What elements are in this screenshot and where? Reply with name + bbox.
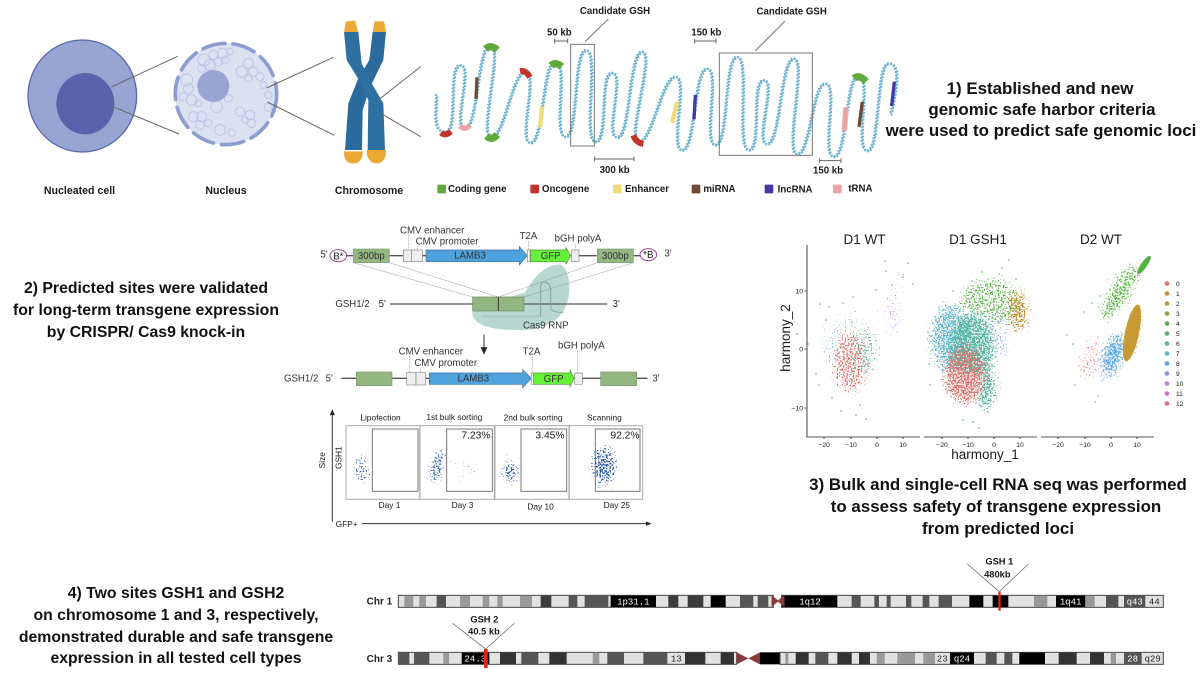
flow labels: Day 10 — [527, 502, 554, 512]
miRNA marks — [476, 77, 862, 127]
legend: Oncogene — [542, 184, 590, 195]
enhancer marks — [540, 102, 677, 127]
legend: miRNA — [703, 184, 736, 195]
icon: chromosome — [344, 21, 386, 163]
flow labels: Lipofection — [360, 413, 401, 423]
legend — [437, 184, 872, 195]
donor construct: *B — [643, 250, 653, 261]
plot titles — [844, 232, 1122, 247]
edited locus: 3' — [652, 373, 660, 384]
GSH target locus: 5' — [379, 299, 386, 310]
panel: chromatin strand with annotated elements — [435, 6, 897, 195]
axis tick labels: 0 — [799, 346, 803, 354]
flow axis arrows — [330, 410, 651, 526]
plot titles: D1 GSH1 — [949, 232, 1007, 247]
ideogram: chromosome 1: 1q41 — [1060, 597, 1081, 607]
candidate GSH labels: Candidate GSH — [757, 6, 827, 17]
Cas9 RNP blob — [472, 264, 569, 330]
axis tick labels: 10 — [1016, 442, 1024, 449]
ideogram: chromosome 1: 1q12 — [799, 597, 821, 607]
cluster legend: 6 — [1176, 341, 1180, 348]
ideogram: chromosome 1: 44 — [1149, 597, 1160, 607]
scatter D1 GSH1 — [928, 260, 1030, 428]
scatter D1 WT — [797, 261, 913, 419]
legend: Enhancer — [625, 184, 669, 195]
axis tick labels: −20 — [1052, 442, 1064, 449]
cluster legend: 7 — [1176, 351, 1180, 358]
GSH target locus: GSH1/2 — [335, 299, 370, 310]
donor construct: 300bp — [602, 251, 629, 262]
edited locus: GSH1/2 — [284, 373, 318, 384]
ideogram: chromosome 3: q24 — [954, 654, 970, 664]
donor construct: 3' — [664, 248, 672, 259]
plot titles: D2 WT — [1080, 232, 1122, 247]
marker: GSH 1: GSH 1 — [985, 557, 1013, 567]
cluster legend: 5 — [1176, 331, 1180, 338]
panel: cell to chromatin overview — [28, 21, 421, 197]
scale bars — [547, 28, 843, 176]
axis titles — [778, 304, 1019, 462]
flow labels: Day 1 — [379, 500, 401, 510]
flow labels: Scanning — [587, 413, 622, 423]
ideogram: chromosome 3: 28 — [1127, 654, 1138, 664]
cluster legend: 9 — [1176, 371, 1180, 378]
scale bars: 300 kb — [600, 165, 630, 176]
heading 4: on chromosome 1 and 3, respectively, — [33, 607, 319, 624]
legend: tRNA — [848, 184, 872, 195]
axis tick labels: −10 — [1079, 442, 1091, 449]
tRNA marks — [460, 107, 846, 131]
edited locus: bGH polyA — [558, 341, 605, 352]
flow labels: Size — [317, 452, 327, 468]
ideogram: chromosome 3: q29 — [1145, 654, 1161, 664]
axis tick labels: 0 — [992, 442, 996, 449]
ideogram: chromosome 1 — [367, 595, 1163, 607]
marker: GSH 1 — [967, 557, 1028, 611]
flow labels: 3.45% — [535, 430, 565, 441]
flow labels: 7.23% — [461, 430, 491, 441]
candidate GSH boxes — [571, 19, 812, 155]
heading 3: 3) Bulk and single-cell RNA seq was performed — [809, 475, 1187, 494]
donor construct — [320, 225, 672, 265]
legend: Coding gene — [448, 184, 507, 195]
donor construct: bGH polyA — [555, 234, 602, 245]
marker: GSH 2: GSH 2 — [470, 614, 498, 624]
GSH target locus — [335, 282, 620, 331]
donor construct: 5' — [320, 250, 328, 261]
marker: GSH 2 — [453, 614, 514, 668]
cluster legend: 3 — [1176, 311, 1180, 318]
donor construct: T2A — [520, 231, 538, 242]
cluster legend: 10 — [1176, 381, 1184, 388]
flow labels: 1st bulk sorting — [426, 412, 483, 422]
flow scatter points — [355, 443, 618, 489]
cluster legend: 4 — [1176, 321, 1180, 328]
ideogram: chromosome 1: Chr 1 — [367, 596, 393, 607]
scale bars: 50 kb — [547, 28, 572, 39]
scale bars: 150 kb — [691, 28, 721, 39]
heading 4: expression in all tested cell types — [50, 650, 302, 667]
axis tick labels: −10 — [845, 442, 857, 449]
heading 4: 4) Two sites GSH1 and GSH2 — [68, 585, 284, 602]
edited locus: T2A — [523, 347, 541, 358]
GSH target locus: 3' — [613, 299, 620, 310]
donor construct: LAMB3 — [454, 250, 486, 261]
flow labels — [317, 412, 640, 529]
GSH target locus: Cas9 RNP — [523, 320, 569, 331]
axis titles: harmony_1 — [951, 447, 1019, 462]
flow labels: GFP+ — [336, 519, 358, 529]
label: chromosome: Chromosome — [335, 185, 403, 197]
marker: GSH 1: 480kb — [984, 569, 1011, 579]
edited locus: CMV promoter — [414, 358, 478, 369]
cluster legend: 1 — [1176, 291, 1180, 298]
edited locus: LAMB3 — [457, 374, 489, 385]
flow frames and gates — [346, 426, 643, 499]
candidate GSH labels: Candidate GSH — [580, 6, 650, 17]
panel: single-cell UMAP scatter plots — [778, 232, 1184, 462]
heading 3: from predicted loci — [922, 519, 1074, 538]
axis tick labels — [791, 288, 1141, 449]
edited locus: 5' — [326, 373, 333, 384]
plot titles: D1 WT — [844, 232, 886, 247]
oncogene marks — [441, 71, 643, 144]
axis tick labels: 10 — [1133, 442, 1141, 449]
scatter D2 WT — [1067, 252, 1154, 402]
ideogram: chromosome 3: 24.3 — [465, 654, 486, 664]
ideogram: chromosome 3: 13 — [671, 654, 682, 664]
cluster legend: 8 — [1176, 361, 1180, 368]
ideogram: chromosome 3: Chr 3 — [367, 654, 393, 665]
axis tick labels: 10 — [899, 442, 907, 449]
scale bars: 150 kb — [813, 165, 843, 176]
axis tick labels: −20 — [936, 442, 948, 449]
axis titles: harmony_2 — [778, 304, 793, 372]
cluster legend: 0 — [1176, 281, 1180, 288]
donor construct: CMV enhancer — [400, 225, 465, 236]
heading 2: for long-term transgene expression — [13, 302, 279, 319]
heading 1: 1) Established and new — [947, 79, 1134, 98]
icon: nucleated cell — [28, 40, 137, 152]
panel: chromosome ideograms — [367, 557, 1163, 668]
cluster legend: 12 — [1176, 401, 1184, 408]
heading 1: genomic safe harbor criteria — [928, 100, 1156, 119]
donor construct: 300bp — [358, 251, 385, 262]
lncRNA marks — [694, 82, 894, 119]
down arrow — [481, 334, 487, 354]
coding gene marks — [486, 47, 866, 138]
flow labels: GSH1 — [334, 446, 344, 469]
cluster legend: 2 — [1176, 301, 1180, 308]
heading 4: demonstrated durable and safe transgene — [19, 629, 333, 646]
heading 1: were used to predict safe genomic loci — [885, 121, 1196, 140]
flow labels: 92.2% — [610, 430, 640, 441]
heading 3: to assess safety of transgene expression — [831, 497, 1161, 516]
ideogram: chromosome 3 — [367, 652, 1163, 665]
flow labels: Day 3 — [452, 500, 474, 510]
dotted chromatin strand — [435, 45, 897, 157]
cluster legend — [1165, 281, 1184, 408]
donor construct: CMV promoter — [416, 236, 479, 247]
heading 2: by CRISPR/ Cas9 knock-in — [47, 324, 245, 341]
cluster legend: 11 — [1176, 391, 1183, 398]
edited locus: CMV enhancer — [399, 347, 464, 358]
candidate GSH labels — [580, 6, 827, 17]
marker: GSH 2: 40.5 kb — [468, 627, 500, 637]
plot axes — [804, 245, 1154, 439]
donor construct: GFP — [541, 251, 561, 262]
edited locus — [284, 341, 660, 388]
flow labels: Day 25 — [604, 500, 630, 510]
homology arm guide lines — [353, 263, 633, 297]
legend: lncRNA — [778, 184, 813, 195]
flow labels: 2nd bulk sorting — [504, 413, 563, 423]
label: nucleated cell: Nucleated cell — [44, 185, 115, 197]
panel: flow cytometry time course — [317, 410, 651, 529]
panel: knock-in construct diagrams — [284, 225, 672, 388]
label: nucleus: Nucleus — [205, 185, 247, 197]
axis tick labels: −20 — [818, 442, 830, 449]
axis tick labels: 0 — [875, 442, 879, 449]
edited locus: GFP — [544, 374, 564, 385]
ideogram: chromosome 1: q43 — [1127, 597, 1143, 607]
ideogram: chromosome 3: 23 — [937, 654, 948, 664]
axis tick labels: 10 — [795, 288, 803, 296]
axis tick labels: −10 — [962, 442, 974, 449]
icon: nucleus — [175, 43, 277, 145]
ideogram: chromosome 1: 1p31.1 — [617, 597, 650, 607]
axis tick labels: 0 — [1109, 442, 1113, 449]
donor construct: B* — [333, 251, 344, 262]
heading 2: 2) Predicted sites were validated — [24, 280, 268, 297]
axis tick labels: −10 — [791, 406, 803, 412]
